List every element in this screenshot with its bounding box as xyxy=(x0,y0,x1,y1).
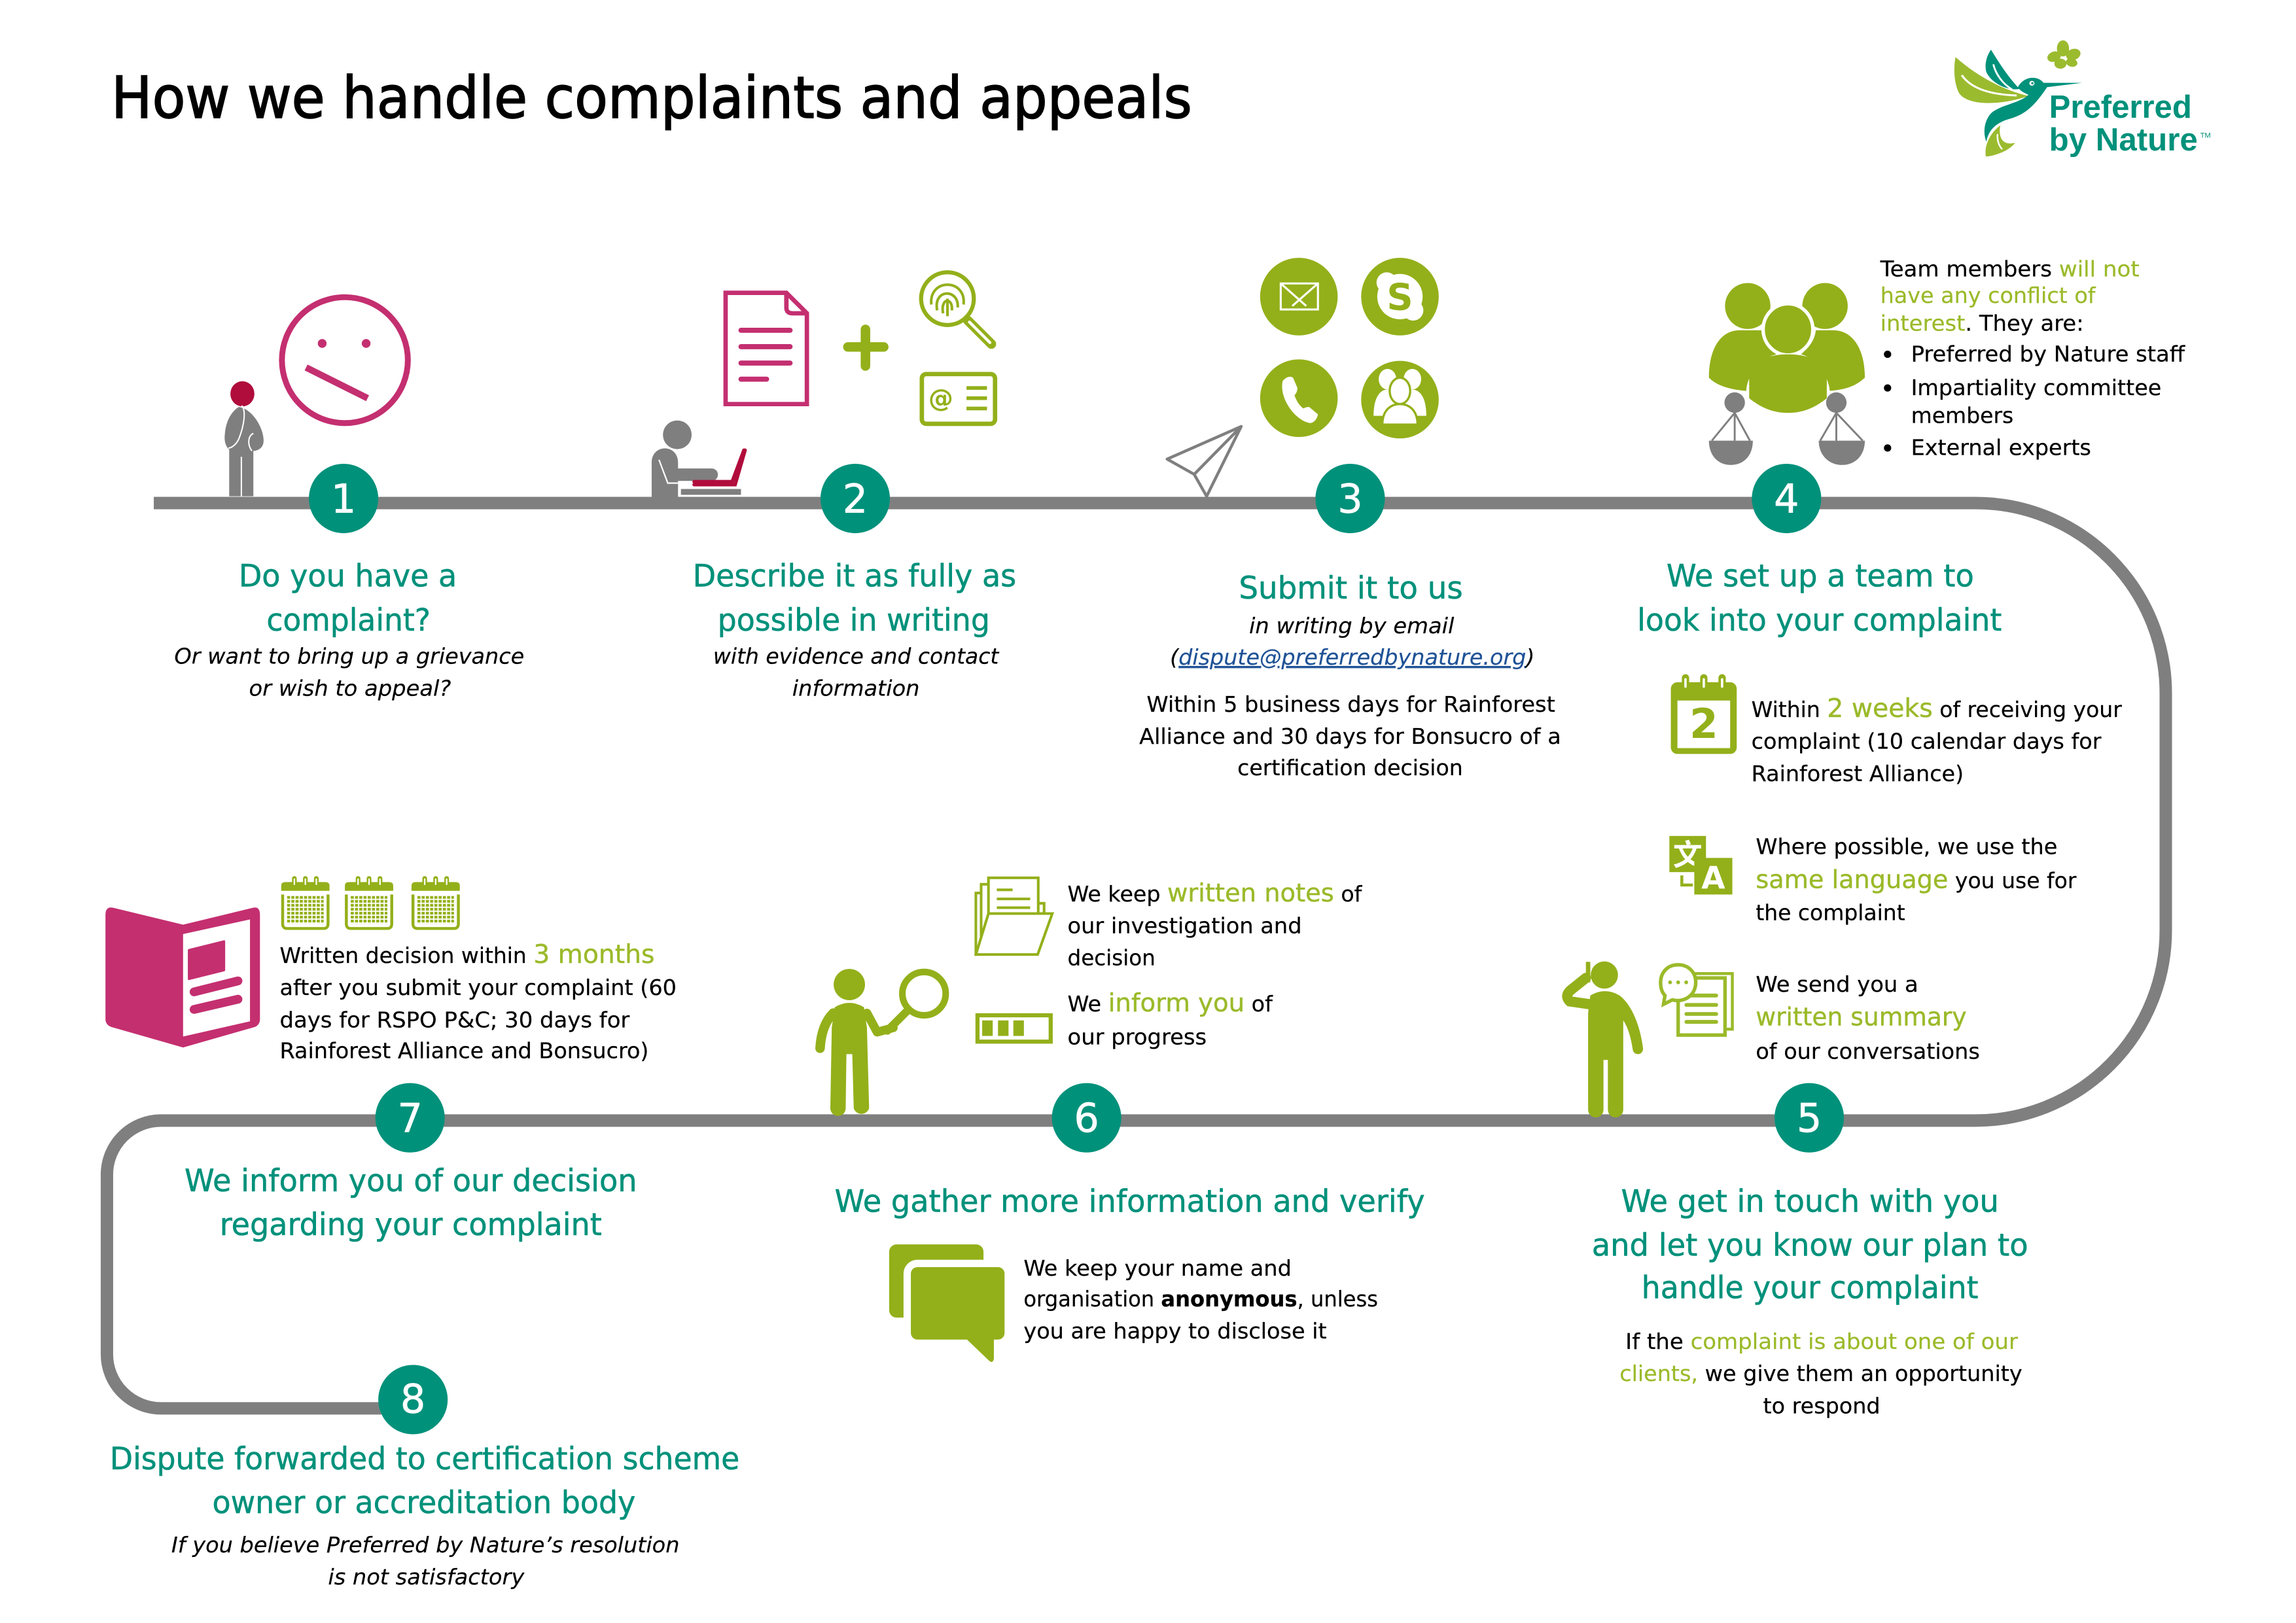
panel: step 2 xyxy=(652,272,1016,701)
text: written notes: We keep written notes of xyxy=(1068,879,1363,907)
icon: person with magnifier xyxy=(820,969,945,1116)
icon: three calendars xyxy=(281,879,460,928)
heading: Dispute forwarded to certification scheme xyxy=(110,1441,739,1477)
logo: Preferred by Nature: TM xyxy=(2200,131,2211,139)
panel: step 4 xyxy=(1637,256,2185,786)
subtext: or wish to appeal? xyxy=(249,676,451,701)
subtext: information xyxy=(792,676,919,701)
panel: step 5 xyxy=(1567,833,2077,1418)
icon: report booklet xyxy=(105,907,260,1047)
heading xyxy=(239,559,457,638)
text: deadlines: certification decision xyxy=(1237,755,1463,780)
icon: progress bar xyxy=(978,1015,1051,1041)
heading: We gather more information and verify xyxy=(835,1183,1425,1219)
number 3 xyxy=(1315,464,1385,533)
number 6 xyxy=(1052,1083,1122,1153)
text: same language xyxy=(1756,833,2077,926)
icon: people xyxy=(1361,361,1439,438)
text: team members: interest. They are: xyxy=(1881,310,2084,336)
heading: Submit it to us xyxy=(1239,570,1463,606)
subtext: in writing by email xyxy=(1249,613,1454,638)
number 8 xyxy=(378,1365,448,1435)
text: anonymous: We keep your name and xyxy=(1023,1255,1292,1281)
text: written notes: decision xyxy=(1068,945,1156,970)
subtext: with evidence and contact xyxy=(713,643,999,669)
subtext xyxy=(713,643,999,701)
icon: written summary xyxy=(1661,965,1733,1035)
icon: document xyxy=(726,293,807,404)
icon: translate xyxy=(1669,836,1733,896)
text: progress: our progress xyxy=(1068,1024,1207,1049)
text: two weeks: Rainforest Alliance) xyxy=(1752,761,1964,786)
text: three months: Rainforest Alliance and Bonsucro) xyxy=(280,1038,648,1063)
text: team members: members xyxy=(1911,402,2013,428)
text: team members: Impartiality committee xyxy=(1911,375,2161,400)
icon: fingerprint magnifier xyxy=(921,272,991,344)
number 4 xyxy=(1752,464,1821,533)
heading xyxy=(1592,1183,2028,1306)
text: anonymous: you are happy to disclose it xyxy=(1023,1318,1327,1344)
text: team members xyxy=(1880,256,2185,461)
heading: Describe it as fully as xyxy=(693,559,1016,595)
subtext: is not satisfactory xyxy=(328,1564,525,1590)
subtext xyxy=(174,643,524,701)
icon: person at laptop xyxy=(652,421,745,502)
text: written summary: of our conversations xyxy=(1756,1039,1980,1064)
logo: Preferred by Nature: Preferred xyxy=(2049,89,2192,125)
number 3: 3 xyxy=(1337,476,1363,522)
text: written notes xyxy=(1068,879,1363,970)
icon: translate: A xyxy=(1701,860,1725,896)
subtext: clients, we give them an opportunity xyxy=(1619,1361,2022,1386)
logo: Preferred by Nature: by Nature xyxy=(2049,122,2198,158)
panel: step 1 xyxy=(174,297,524,701)
text: progress: We inform you of xyxy=(1068,988,1273,1017)
subtext: If you believe Preferred by Nature’s resolution xyxy=(171,1532,679,1558)
icon: phone xyxy=(1260,359,1337,437)
icon: unhappy face xyxy=(282,297,408,423)
subtext xyxy=(1619,1329,2022,1418)
heading: look into your complaint xyxy=(1637,602,2002,638)
number 7 xyxy=(376,1083,445,1153)
heading: owner or accreditation body xyxy=(213,1485,635,1521)
icon: plus xyxy=(848,330,884,366)
number 8: 8 xyxy=(400,1377,425,1423)
panel: step 3 xyxy=(1139,258,1561,780)
logo: Preferred by Nature xyxy=(1954,41,2211,158)
subtext xyxy=(1170,613,1534,670)
icon: team with scales xyxy=(1709,283,1865,465)
subtext: Or want to bring up a grievance xyxy=(174,643,524,669)
panel: step 8 xyxy=(110,1365,739,1590)
text: three months: after you submit your complaint (60 xyxy=(280,975,677,1000)
heading xyxy=(693,559,1016,638)
number 6: 6 xyxy=(1074,1096,1099,1142)
text: deadlines: Within 5 business days for Rainforest xyxy=(1146,691,1555,717)
subtext: to respond xyxy=(1763,1393,1881,1418)
heading xyxy=(1637,559,2002,638)
text: deadlines: Alliance and 30 days for Bonsucro of a xyxy=(1139,724,1561,749)
text: deadlines xyxy=(1139,691,1561,780)
timeline path xyxy=(107,503,2166,1408)
title: How we handle complaints and appeals xyxy=(111,64,1192,131)
number 2: 2 xyxy=(843,476,868,522)
text: team members: External experts xyxy=(1911,435,2091,461)
text: anonymous xyxy=(1023,1255,1378,1344)
text: written notes: our investigation and xyxy=(1068,913,1302,938)
text: same language: the complaint xyxy=(1756,900,1905,926)
number 1 xyxy=(309,464,378,533)
subtext xyxy=(171,1532,679,1590)
panel: step 6 xyxy=(820,878,1425,1362)
icon: ID card: @ xyxy=(928,384,953,413)
text: written summary xyxy=(1756,971,1980,1064)
icon: calendar two weeks: 2 xyxy=(1689,700,1718,748)
text: three months xyxy=(280,940,677,1063)
icon: folder xyxy=(976,878,1052,954)
heading: handle your complaint xyxy=(1642,1270,1979,1306)
number 2 xyxy=(821,464,890,533)
text: same language: Where possible, we use the xyxy=(1756,833,2057,859)
subtext: (dispute@preferredbynature.org ) xyxy=(1170,644,1534,670)
heading: We set up a team to xyxy=(1667,559,1974,595)
heading xyxy=(185,1163,637,1243)
text: progress xyxy=(1068,988,1273,1049)
icon: skype xyxy=(1361,258,1439,336)
icon: thinking person xyxy=(224,381,264,497)
text: three months: days for RSPO P&C; 30 days for xyxy=(280,1007,630,1032)
heading: Do you have a xyxy=(239,559,457,595)
icon: person on phone xyxy=(1567,962,1643,1117)
icon: paper plane xyxy=(1167,427,1241,497)
text: two weeks xyxy=(1752,694,2122,786)
icon: calendar two weeks xyxy=(1671,678,1737,754)
heading: We get in touch with you xyxy=(1621,1183,1999,1219)
number 5: 5 xyxy=(1797,1096,1822,1142)
text: anonymous: organisation anonymous, unless xyxy=(1023,1286,1378,1312)
icon: email xyxy=(1260,258,1337,336)
number 5 xyxy=(1775,1083,1844,1153)
panel: step 7 xyxy=(105,879,677,1243)
heading: regarding your complaint xyxy=(220,1207,602,1243)
number 4: 4 xyxy=(1774,476,1799,522)
heading xyxy=(110,1441,739,1521)
heading: and let you know our plan to xyxy=(1592,1227,2028,1263)
icon: ID card xyxy=(922,374,995,424)
text: written summary: We send you a xyxy=(1756,971,1918,997)
icon: skype: S xyxy=(1386,276,1413,319)
text: two weeks: complaint (10 calendar days for xyxy=(1752,729,2102,754)
heading: We inform you of our decision xyxy=(185,1163,637,1199)
text: three months: Written decision within 3 months xyxy=(280,940,654,969)
text: team members: Team members will not xyxy=(1880,256,2140,282)
number 7: 7 xyxy=(397,1096,423,1142)
icon: translate: 文 xyxy=(1673,839,1703,872)
text: two weeks: Within 2 weeks of receiving your xyxy=(1752,694,2122,724)
heading: possible in writing xyxy=(718,602,990,638)
subtext: If the complaint is about one of our xyxy=(1625,1329,2018,1354)
text: written summary: written summary xyxy=(1756,1003,1967,1032)
number 1: 1 xyxy=(331,476,356,522)
heading: complaint? xyxy=(266,602,431,638)
text: team members: Preferred by Nature staff xyxy=(1911,341,2185,366)
text: team members: have any conflict of xyxy=(1881,283,2096,308)
icon: chat bubbles xyxy=(889,1244,1008,1362)
text: same language: same language you use for xyxy=(1756,865,2077,894)
